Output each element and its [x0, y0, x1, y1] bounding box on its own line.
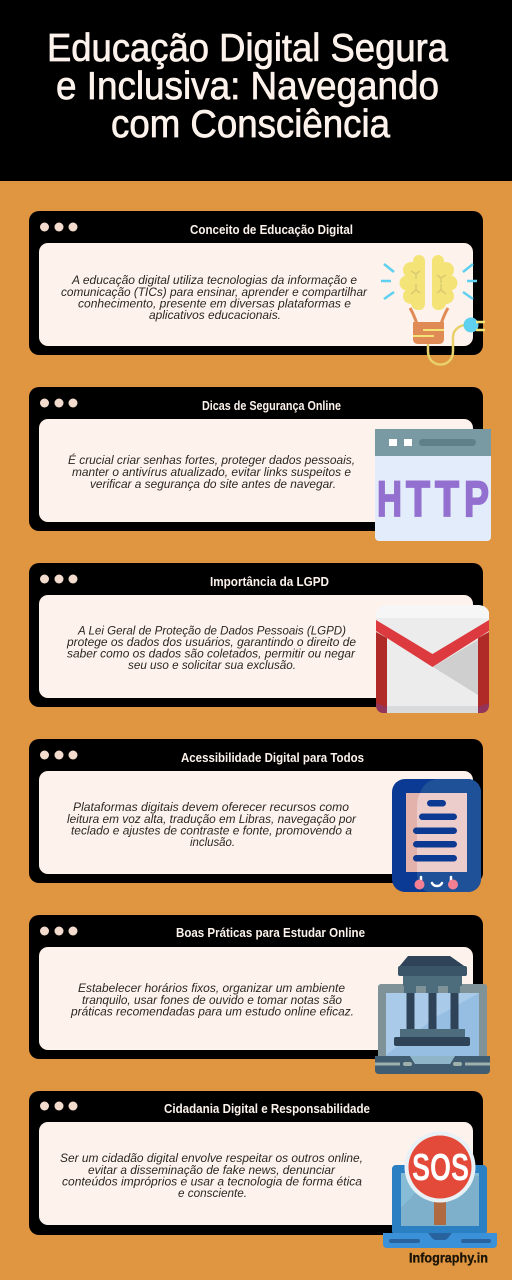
panel: dicas de segurança online [29, 387, 483, 531]
text block: Plataformas digitais devem oferecer recursos como [73, 802, 350, 814]
icon: http browser window: T [406, 471, 430, 527]
heading: Cidadania Digital e Responsabilidade [164, 1102, 370, 1116]
text block: seu uso e solicitar sua exclusão. [128, 660, 296, 672]
panel: cidadania digital e responsabilidade [29, 1091, 483, 1235]
text block: leitura em voz alta, tradução em Libras, navegação por [67, 814, 357, 826]
text block: Ser um cidadão digital envolve respeitar os outros online, [60, 1153, 363, 1165]
text block: manter o antivírus atualizado, evitar links suspeitos e [72, 467, 351, 479]
text block: conhecimento, presente em diversas plataformas e [78, 298, 351, 310]
heading: Acessibilidade Digital para Todos [181, 751, 364, 765]
icon: http browser window [375, 429, 491, 541]
text block [70, 983, 354, 1018]
title: e Inclusiva: Navegando [56, 65, 439, 108]
title banner [0, 0, 512, 181]
text block: comunicação (TICs) para ensinar, aprender e compartilhar [61, 287, 368, 299]
icon: e-reader tablet [392, 779, 481, 892]
text block: teclado e ajustes de contraste e fonte, promovendo a [71, 826, 352, 838]
text block: A Lei Geral de Proteção de Dados Pessoais (LGPD) [77, 626, 346, 638]
title: com Consciência [111, 103, 390, 146]
text block: verificar a segurança do site antes de navegar. [90, 479, 336, 491]
heading: Boas Práticas para Estudar Online [176, 926, 365, 940]
text block [66, 626, 356, 672]
panel: acessibilidade digital para todos [29, 739, 483, 883]
text block: aplicativos educacionais. [149, 310, 281, 322]
watermark: Infography.in [409, 1250, 488, 1266]
text block: saber como os dados são coletados, permitir ou negar [67, 648, 356, 660]
text block: A educação digital utiliza tecnologias da informação e [71, 275, 357, 287]
icon: http browser window: H [377, 471, 402, 527]
text block: práticas recomendadas para um estudo online eficaz. [70, 1006, 354, 1018]
text block: e consciente. [178, 1188, 247, 1200]
icon: sos sign on laptop: SOS [412, 1147, 469, 1189]
text block: É crucial criar senhas fortes, proteger dados pessoais, [68, 454, 355, 467]
text block [68, 454, 355, 491]
panel: boas práticas para estudar online [29, 915, 483, 1059]
heading: Importância da LGPD [210, 575, 329, 589]
icon: light bulb brain [381, 255, 485, 364]
text block [60, 1153, 363, 1200]
heading: Conceito de Educação Digital [190, 223, 353, 237]
text block: protege os dados dos usuários, garantindo o direito de [66, 637, 356, 649]
panel: conceito de educação digital [29, 211, 483, 355]
text block: conteúdos impróprios e usar a tecnologia de forma ética [62, 1176, 362, 1188]
icon: museum on laptop [375, 956, 490, 1074]
text block [67, 802, 357, 849]
icon: gmail envelope [376, 605, 489, 713]
text block [61, 275, 368, 322]
text block: inclusão. [190, 837, 235, 849]
title: Educação Digital Segura [47, 27, 448, 70]
panel: importância da lgpd [29, 563, 483, 707]
icon: http browser window: P [464, 471, 489, 527]
text block: Estabelecer horários fixos, organizar um ambiente [78, 983, 345, 995]
icon: sos sign on laptop [383, 1132, 497, 1248]
title [47, 27, 448, 146]
text block: tranquilo, usar fones de ouvido e tomar notas são [82, 995, 343, 1007]
icon: http browser window: T [435, 471, 459, 527]
heading: Dicas de Segurança Online [202, 399, 341, 413]
text block: evitar a disseminação de fake news, denunciar [88, 1165, 336, 1177]
